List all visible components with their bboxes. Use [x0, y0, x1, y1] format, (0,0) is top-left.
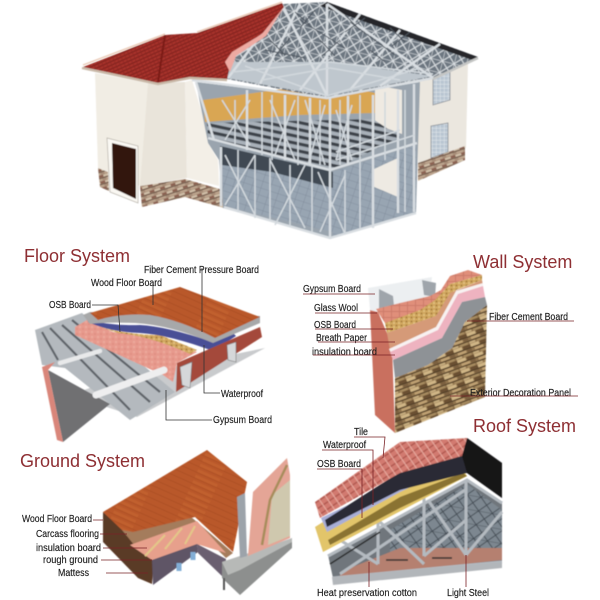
footing bolts	[223, 578, 225, 590]
lower room floor	[220, 146, 333, 232]
label: OSB Board: OSB Board	[49, 300, 91, 311]
edge clips	[180, 362, 192, 388]
pink cotton under truss	[340, 548, 502, 578]
label: insulation board: insulation board	[312, 347, 377, 358]
wall system illustration	[368, 270, 487, 433]
leader lines	[92, 268, 220, 420]
lower room dark back	[220, 146, 333, 188]
steel stud left	[379, 289, 395, 315]
upper window	[433, 68, 450, 105]
label: Exterior Decoration Panel: Exterior Decoration Panel	[470, 388, 571, 399]
cut wall	[185, 80, 219, 186]
truss section	[328, 480, 502, 578]
right wing wall	[418, 62, 468, 164]
right eave	[433, 58, 478, 79]
purple wall front	[152, 544, 198, 585]
heading: Ground System: Ground System	[20, 451, 145, 471]
door frame	[107, 138, 138, 203]
label: Wood Floor Board: Wood Floor Board	[91, 278, 162, 289]
exposed brown layer	[122, 516, 233, 558]
lower room back	[333, 145, 416, 236]
roof tile surface	[315, 438, 467, 518]
blue film	[321, 456, 467, 532]
insulation board	[390, 286, 485, 360]
centre wall	[140, 82, 187, 186]
lower white wall	[372, 158, 398, 197]
label: Waterproof: Waterproof	[221, 389, 263, 400]
door	[112, 143, 136, 199]
roof labels	[317, 427, 489, 599]
label: Tile: Tile	[354, 427, 368, 438]
middle clip	[227, 342, 236, 362]
stone panel	[395, 305, 487, 433]
glass wool	[376, 270, 482, 325]
leader lines	[317, 437, 466, 587]
wall osb	[262, 465, 287, 545]
steel post	[237, 493, 247, 558]
large pipe	[96, 370, 164, 395]
ground labels	[22, 514, 152, 579]
insulation upper floor	[203, 80, 375, 122]
small pipe	[60, 351, 100, 363]
truss members	[328, 480, 502, 578]
dark truss shadow	[330, 532, 452, 564]
label: Glass Wool: Glass Wool	[314, 303, 358, 314]
label: Gypsum Board: Gypsum Board	[213, 415, 272, 426]
fiber cement	[393, 297, 487, 378]
breath paper	[387, 280, 483, 350]
label: Wood Floor Board: Wood Floor Board	[22, 514, 92, 525]
olive layer	[328, 473, 467, 545]
label: Fiber Cement Pressure Board: Fiber Cement Pressure Board	[144, 265, 259, 276]
floor system illustration	[35, 287, 265, 442]
waterproof layer	[88, 320, 236, 351]
dark waterproof	[325, 438, 502, 527]
steel joists	[35, 313, 175, 420]
truss glazing	[390, 484, 502, 565]
gypsum base plate	[70, 348, 265, 417]
stone base main	[140, 179, 224, 208]
pink insulation	[75, 320, 197, 382]
heading: Roof System: Roof System	[473, 416, 576, 436]
label: Breath Paper: Breath Paper	[316, 333, 368, 344]
wood top	[90, 287, 260, 338]
blue clamps	[179, 552, 193, 571]
label: Gypsum Board: Gypsum Board	[303, 284, 361, 295]
stone base left	[98, 168, 109, 191]
heading: Floor System: Floor System	[24, 246, 130, 266]
pink edge of ceiling	[42, 362, 63, 442]
label: Waterproof: Waterproof	[323, 440, 366, 451]
wall layers	[248, 458, 290, 556]
grey ceiling panel	[48, 370, 110, 442]
footing top	[222, 538, 292, 575]
label: rough ground: rough ground	[43, 555, 98, 566]
steel roof frame	[227, 2, 478, 98]
upper room wall	[375, 85, 402, 134]
cement layer	[83, 312, 260, 343]
dark floor side	[103, 512, 154, 584]
pink insulation	[130, 521, 226, 560]
house illustration	[82, 2, 478, 238]
label: Heat preservation cotton: Heat preservation cotton	[317, 588, 417, 599]
heading: Wall System: Wall System	[473, 252, 572, 272]
label: OSB Board: OSB Board	[317, 459, 361, 470]
osb board layer	[385, 275, 482, 333]
label: Light Steel: Light Steel	[447, 588, 489, 599]
label: Mattess: Mattess	[58, 568, 89, 579]
black side	[462, 438, 502, 498]
eaves	[82, 68, 227, 84]
joist shadows	[42, 320, 160, 410]
interior back	[196, 82, 420, 238]
steel stud right	[422, 280, 436, 297]
label: OSB Board: OSB Board	[314, 320, 356, 331]
joist floor	[207, 119, 400, 170]
ground system illustration	[103, 450, 292, 595]
purple wall right	[197, 544, 226, 578]
OSB layer	[100, 327, 197, 354]
yellow insulation	[315, 467, 467, 552]
label: Carcass flooring: Carcass flooring	[36, 529, 99, 540]
right stone base	[418, 146, 465, 181]
pink board side	[370, 310, 395, 433]
brick edge board	[176, 327, 262, 392]
lower window	[431, 123, 448, 158]
leader lines	[303, 294, 578, 396]
left wall	[95, 73, 148, 186]
gypsum white board	[368, 277, 432, 312]
base plate	[332, 562, 502, 585]
roof system illustration	[315, 438, 502, 585]
label: Fiber Cement Board: Fiber Cement Board	[489, 312, 568, 323]
sleepers	[145, 526, 195, 556]
floor labels	[49, 265, 272, 426]
wood floor top	[103, 450, 247, 552]
leader lines	[93, 520, 152, 573]
concrete footing	[222, 540, 292, 595]
roof hip ridge	[158, 35, 165, 82]
roof tiles	[83, 3, 284, 83]
rear eave	[83, 2, 282, 65]
white edge	[389, 283, 483, 353]
steel wall frame	[192, 78, 433, 238]
wall cladding	[268, 480, 290, 545]
pink roof insulation	[225, 7, 284, 72]
label: insulation board: insulation board	[36, 543, 101, 554]
wall labels	[303, 284, 578, 399]
